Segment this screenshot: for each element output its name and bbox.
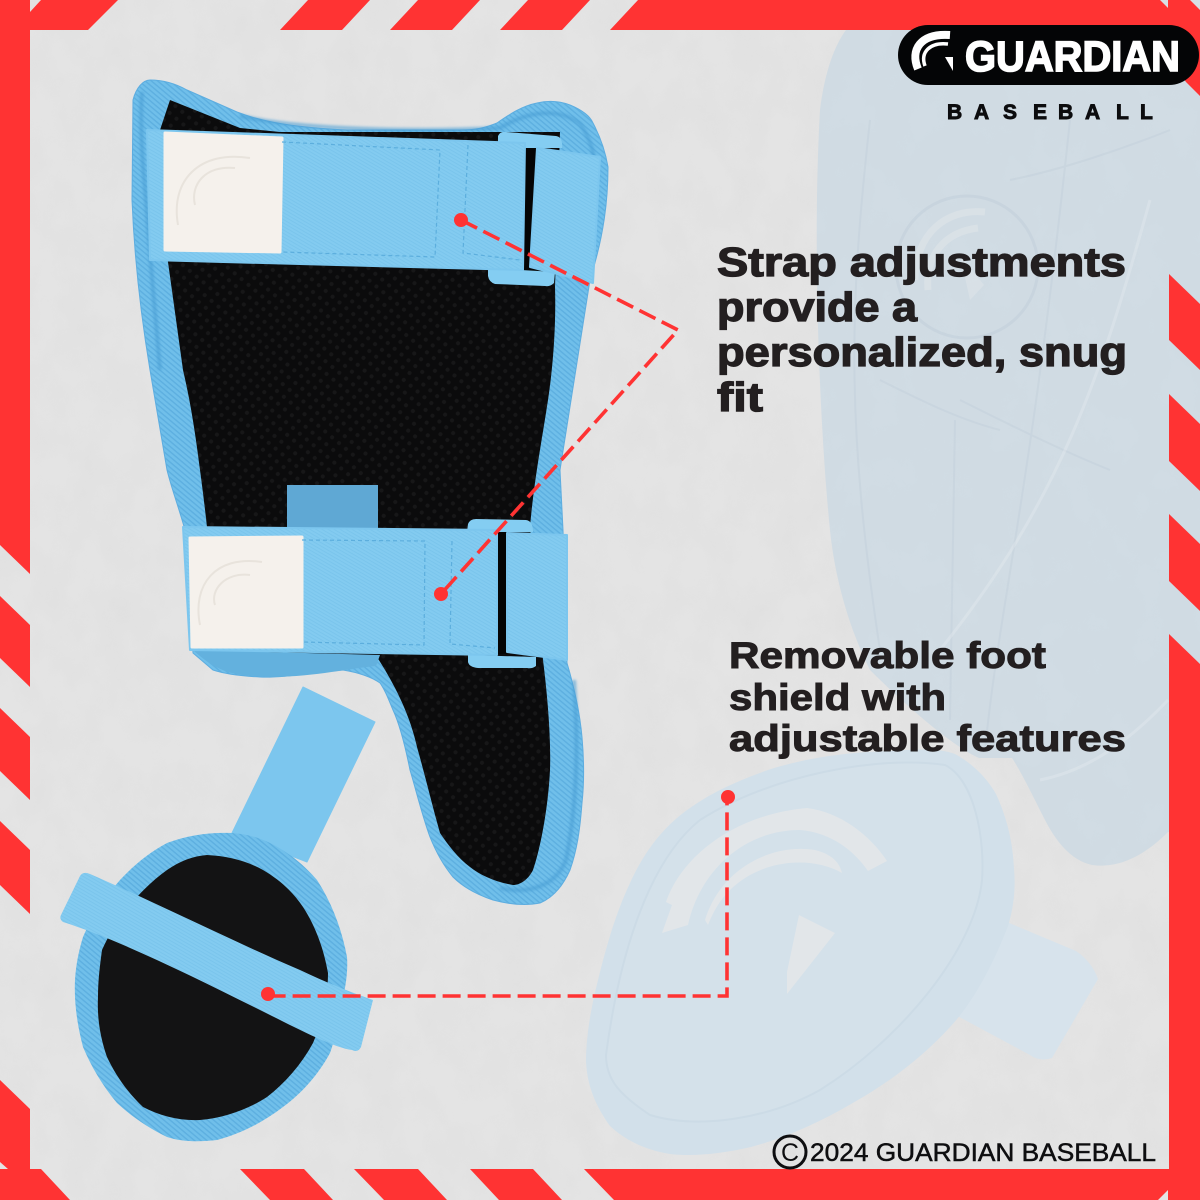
ghost logo on foot shield xyxy=(662,808,887,994)
copyright line: 2024 GUARDIAN BASEBALL xyxy=(810,1139,1156,1167)
text block: strap adjustments: provide a xyxy=(717,284,918,330)
lower strap buckle xyxy=(467,519,536,668)
shin guard blue binding xyxy=(132,80,608,904)
callout: strap leader lines xyxy=(434,213,678,601)
lower binding under strap xyxy=(193,650,380,677)
top strap folded segment xyxy=(530,148,600,283)
foot shield cross strap xyxy=(60,873,373,1051)
foot shield blue binding xyxy=(75,833,347,1141)
text block: removable foot shield xyxy=(729,635,1126,759)
ghost image: faded shin guard xyxy=(817,30,1200,866)
text block: strap adjustments xyxy=(717,239,1127,420)
text block: strap adjustments: fit xyxy=(717,374,763,420)
callout dot: foot shield xyxy=(721,790,735,804)
lower strap long segment xyxy=(183,527,497,655)
wordmark: GUARDIAN xyxy=(965,33,1180,81)
black slit top strap xyxy=(518,148,536,270)
callout dot: foot strap xyxy=(261,987,275,1001)
top strap buckle xyxy=(488,132,562,286)
ghost image: faded foot shield xyxy=(586,749,1098,1155)
top strap velcro patch xyxy=(165,133,282,252)
callout: foot shield leader line xyxy=(261,790,735,1001)
text block: removable foot shield: adjustable features xyxy=(729,718,1126,759)
product: removable foot shield xyxy=(60,687,375,1141)
foot shield tab strap xyxy=(232,687,375,862)
black slit lower strap xyxy=(494,532,510,654)
inner fabric tab xyxy=(287,485,378,531)
product: shin guard, inside view xyxy=(132,80,608,904)
binding seam and top fold shading xyxy=(141,92,597,890)
lower strap folded segment xyxy=(507,533,567,660)
callout dot: lower strap xyxy=(434,587,448,601)
foot shield black lining xyxy=(98,855,328,1120)
text block: strap adjustments: Strap adjustments xyxy=(717,239,1126,285)
sub-brand: BASEBALL xyxy=(947,101,1153,124)
text block: removable foot shield: shield with xyxy=(729,677,946,718)
brand logo: Guardian Baseball xyxy=(898,25,1199,124)
black mesh lining xyxy=(160,100,560,885)
icon: spartan helmet G xyxy=(915,35,953,71)
top strap stitching xyxy=(282,142,520,260)
text block: removable foot shield: Removable foot xyxy=(729,635,1046,676)
copyright line: C xyxy=(781,1139,799,1167)
lower strap velcro patch xyxy=(190,537,302,647)
text block: strap adjustments: personalized, snug xyxy=(717,329,1127,375)
top strap long segment xyxy=(147,130,525,270)
lower strap stitching xyxy=(302,540,495,648)
callout dot: top strap xyxy=(454,213,468,227)
